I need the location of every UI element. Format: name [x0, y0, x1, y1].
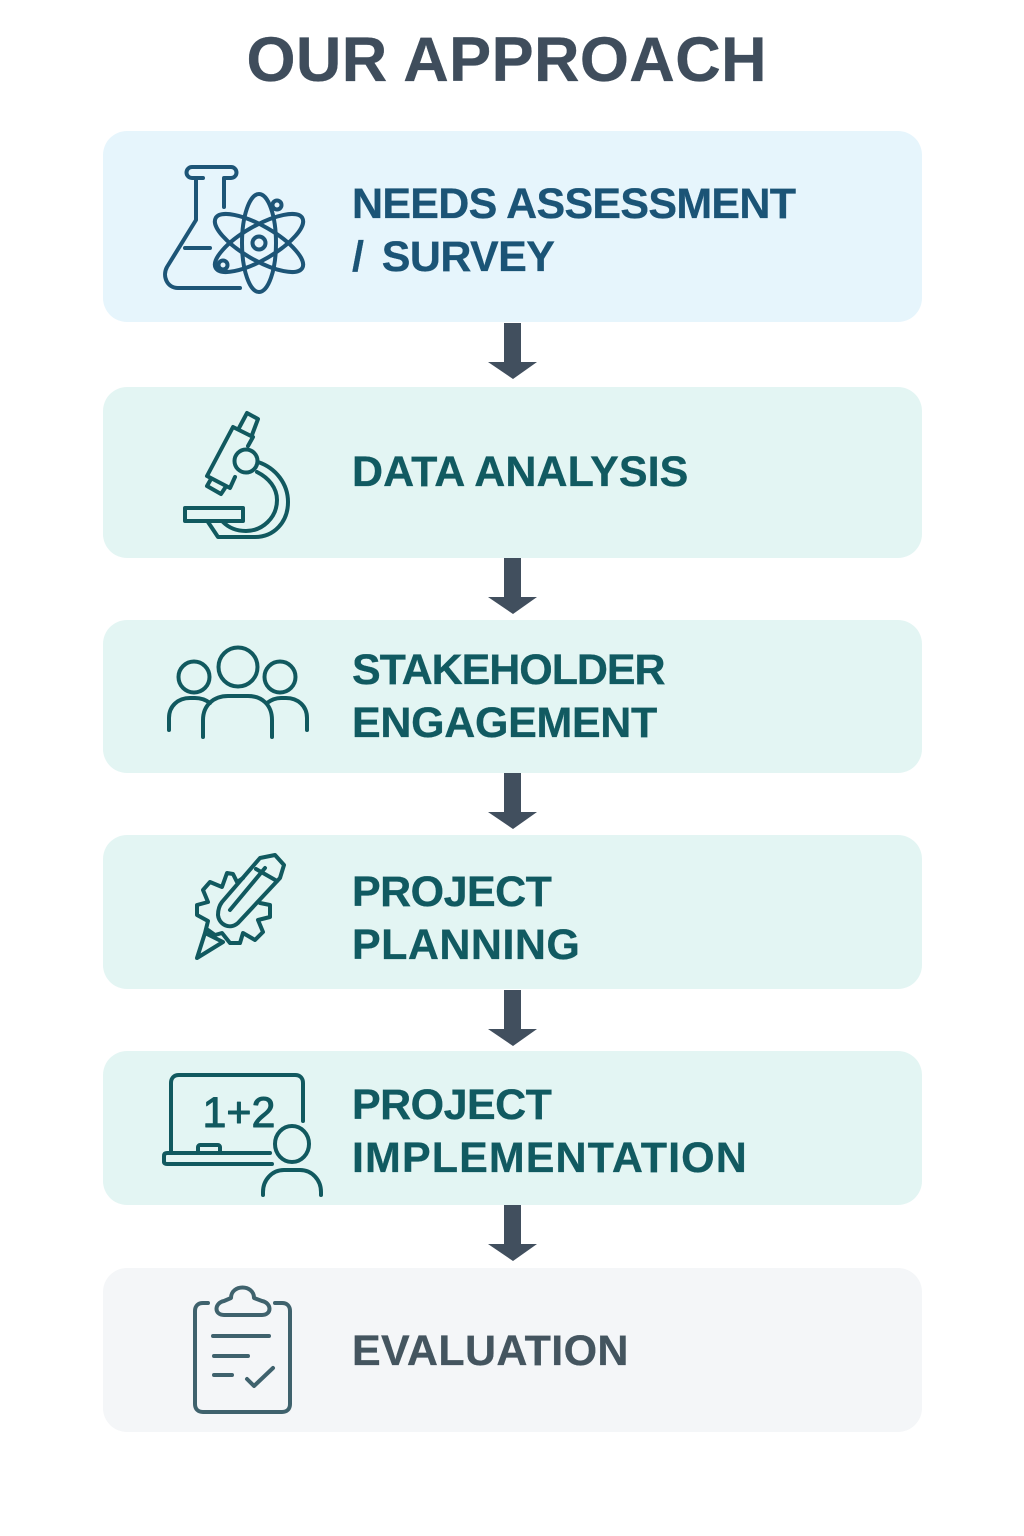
- panel: project implementation: [103, 1051, 922, 1205]
- icon: blackboard and teacher: [162, 1073, 323, 1197]
- heading: project implementation: [352, 1081, 748, 1182]
- heading: needs assessment: / SURVEY: [352, 233, 554, 281]
- heading: stakeholder engagement: STAKEHOLDER: [352, 646, 665, 694]
- panel: project planning: [103, 835, 922, 989]
- heading: stakeholder engagement: [352, 646, 665, 747]
- heading: evaluation: EVALUATION: [352, 1327, 629, 1375]
- panel: stakeholder engagement: [103, 620, 922, 773]
- panel: evaluation: [103, 1268, 922, 1432]
- icon: people: [167, 646, 309, 739]
- icon: clipboard: [193, 1286, 292, 1414]
- heading: project implementation: PROJECT: [352, 1081, 551, 1129]
- icon: gear and pencil: [194, 853, 286, 960]
- heading: project planning: PLANNING: [352, 921, 580, 969]
- heading: project planning: [352, 868, 580, 969]
- heading: data analysis: DATA ANALYSIS: [352, 448, 688, 496]
- heading: needs assessment: NEEDS ASSESSMENT: [352, 180, 795, 228]
- heading: stakeholder engagement: ENGAGEMENT: [352, 699, 657, 747]
- heading: project planning: PROJECT: [352, 868, 551, 916]
- title: OUR APPROACH: [246, 25, 767, 95]
- arrow 5: [488, 1205, 537, 1261]
- heading: needs assessment: [352, 180, 796, 281]
- icon: flask and atom: [163, 165, 306, 294]
- icon: microscope: [183, 410, 290, 539]
- panel: needs assessment: [103, 131, 922, 322]
- heading: project implementation: IMPLEMENTATION: [352, 1134, 748, 1182]
- icon: blackboard and teacher: 1+2: [203, 1089, 275, 1137]
- arrow 2: [488, 558, 537, 614]
- panel: data analysis: [103, 387, 922, 558]
- arrow 1: [488, 323, 537, 379]
- arrow 4: [488, 990, 537, 1046]
- arrow 3: [488, 773, 537, 829]
